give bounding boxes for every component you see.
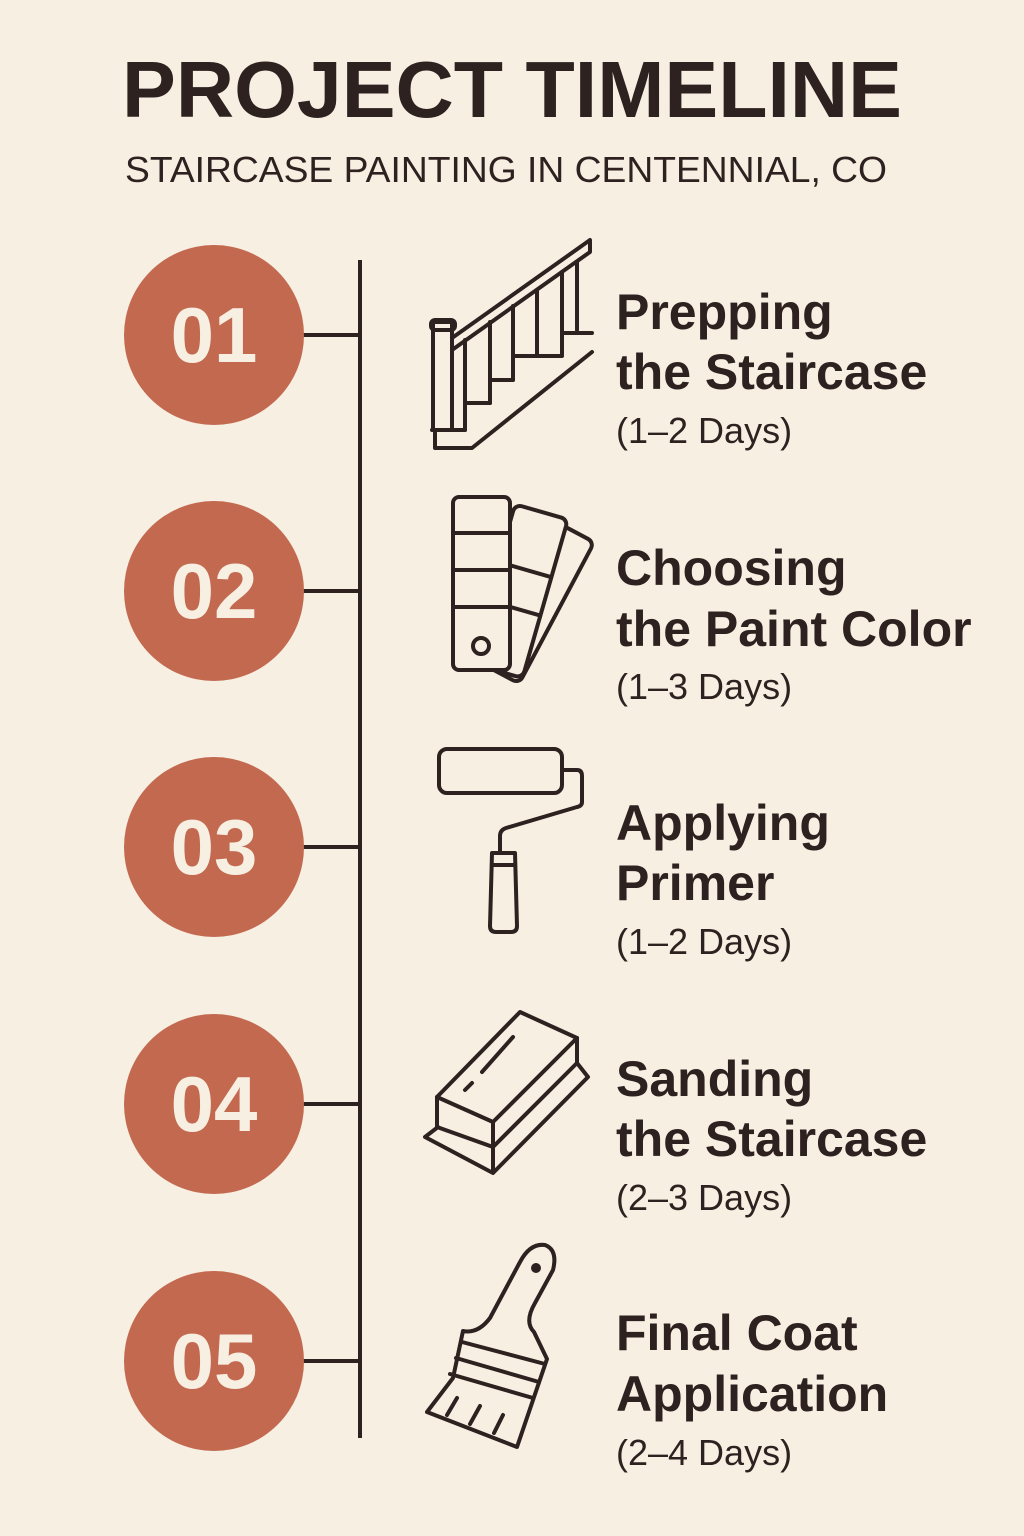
step 1 text: (1–2 Days) — [616, 410, 792, 451]
step 3 circle — [124, 757, 304, 937]
step 1 text — [616, 284, 927, 451]
step 2 text: (1–3 Days) — [616, 666, 792, 707]
title: PROJECT TIMELINE — [122, 45, 902, 134]
step 4 text: Sanding — [616, 1051, 813, 1107]
step 2 text — [616, 540, 972, 707]
icon: sanding block — [425, 1012, 588, 1173]
step 4 circle — [124, 1014, 304, 1194]
step 2 circle: 02 — [171, 547, 257, 635]
step 3 text: (1–2 Days) — [616, 921, 792, 962]
step 3 circle: 03 — [171, 803, 257, 891]
icon: staircase — [431, 240, 592, 448]
step 4 text — [616, 1051, 927, 1218]
step 5 text: (2–4 Days) — [616, 1432, 792, 1473]
step 3 text — [616, 795, 830, 962]
icon: paint brush — [427, 1245, 554, 1447]
timeline line — [300, 260, 360, 1438]
step 1 text: the Staircase — [616, 344, 927, 400]
step 2 text: the Paint Color — [616, 601, 972, 657]
icon: paint swatches — [453, 497, 594, 683]
step 5 text: Final Coat — [616, 1305, 858, 1361]
step 2 circle — [124, 501, 304, 681]
step 4 text: the Staircase — [616, 1111, 927, 1167]
step 5 circle — [124, 1271, 304, 1451]
step 1 text: Prepping — [616, 284, 833, 340]
step 1 circle — [124, 245, 304, 425]
step 2 text: Choosing — [616, 540, 847, 596]
step 5 text: Application — [616, 1366, 888, 1422]
step 1 circle: 01 — [171, 291, 257, 379]
step 5 circle: 05 — [171, 1317, 257, 1405]
icon: paint roller — [439, 749, 582, 932]
step 3 text: Applying — [616, 795, 830, 851]
step 5 text — [616, 1305, 888, 1473]
subtitle: STAIRCASE PAINTING IN CENTENNIAL, CO — [125, 149, 887, 190]
step 3 text: Primer — [616, 855, 774, 911]
step 4 text: (2–3 Days) — [616, 1177, 792, 1218]
step 4 circle: 04 — [171, 1060, 257, 1148]
